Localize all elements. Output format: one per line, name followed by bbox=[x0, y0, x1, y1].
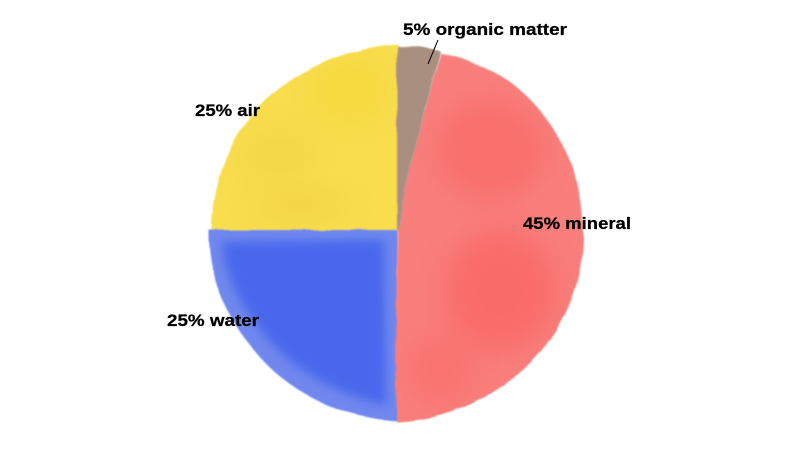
slice: blue water bbox=[209, 230, 398, 421]
soil composition pie chart infographic bbox=[168, 22, 630, 424]
slice: yellow air bbox=[212, 44, 398, 231]
label: organic matter: 5% organic matter bbox=[403, 20, 567, 39]
slice: brown organic matter bbox=[397, 46, 441, 230]
leader line: organic matter bbox=[428, 40, 438, 64]
pie chart bbox=[209, 44, 583, 422]
label: water: 25% water bbox=[167, 311, 259, 330]
label: mineral: 45% mineral bbox=[523, 214, 631, 233]
slice: red mineral bbox=[395, 54, 583, 422]
label: air: 25% air bbox=[195, 101, 260, 120]
